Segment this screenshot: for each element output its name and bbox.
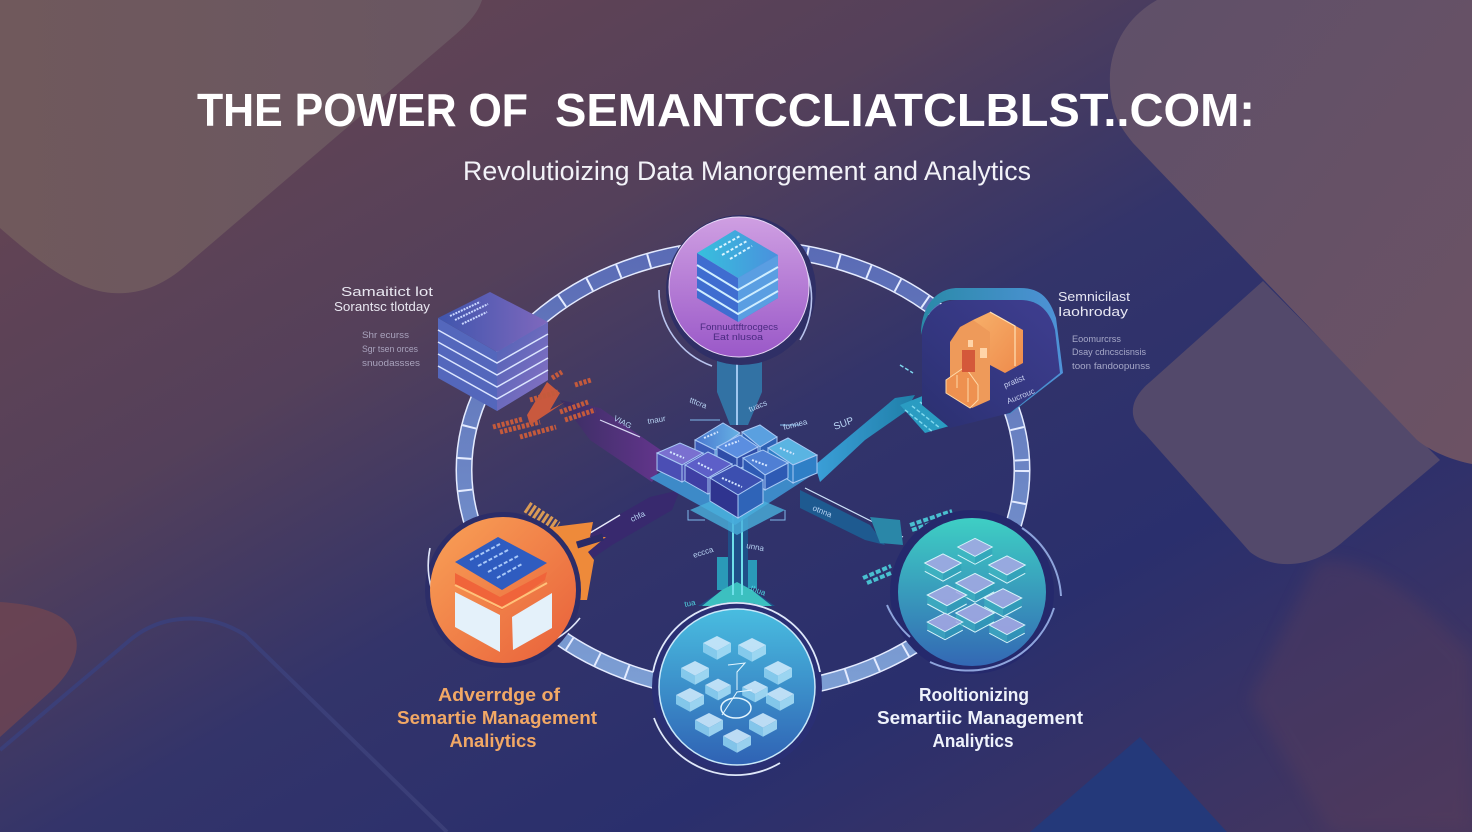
text: bottom-left label: Adverrdge of — [438, 685, 561, 705]
teal circuit right — [863, 365, 953, 583]
text: bottom-left label: Analiytics — [450, 731, 536, 751]
node: left stack — [334, 284, 548, 411]
title — [197, 84, 1255, 136]
text: bottom-right label: Analiytics — [932, 731, 1014, 751]
small connector labels: tttcra — [688, 396, 709, 411]
small connector labels: fonnea — [782, 417, 809, 432]
text: left node label: Shr ecurss — [362, 330, 410, 340]
title: THE POWER OF — [197, 84, 528, 136]
node: right shield — [921, 288, 1151, 428]
small connector labels: otnna — [811, 504, 834, 520]
text: left node label: snuodassses — [362, 358, 421, 368]
subtitle: Revolutioizing Data Manorgement and Analytics — [463, 156, 1031, 186]
small connector labels: chfa — [629, 509, 647, 524]
ring connecting nodes — [464, 248, 1022, 692]
node: top purple circle: Eat nlusoa — [713, 332, 763, 342]
text: left node label: Sorantsc tlotday — [334, 299, 431, 314]
small connector labels — [612, 396, 856, 609]
text: bottom-right label: Rooltionizing — [919, 685, 1029, 705]
node: right shield: Aucrouc — [1005, 387, 1036, 406]
node: top purple circle — [659, 215, 816, 366]
text: right node label: Semnicilast — [1058, 289, 1130, 304]
text: bottom-left label — [397, 685, 597, 751]
central cube cluster — [650, 420, 820, 535]
text: left node label: Samaitict lot — [341, 284, 433, 299]
small connector labels: tua — [684, 598, 697, 609]
text: right node label: Iaohroday — [1058, 304, 1129, 319]
text: right node label: toon fandoopunss — [1072, 361, 1151, 371]
small connector labels: eccca — [692, 545, 715, 560]
node: bottom-left orange circle — [397, 512, 597, 751]
text: right node label: Dsay cdncscisnsis — [1072, 347, 1146, 357]
icon: layered stack — [438, 292, 548, 411]
text: left node label — [334, 284, 433, 368]
icon: network of cubes — [676, 636, 794, 753]
text: left node label: Sgr tsen orces — [362, 344, 418, 354]
node: bottom-right teal circle — [877, 510, 1083, 751]
orange circuit left — [493, 372, 595, 437]
title: SEMANTCCLIATCLBLST..COM: — [555, 84, 1255, 136]
icon: open book — [455, 537, 552, 652]
text: bottom-right label — [877, 685, 1083, 751]
node: right shield: pratist — [1002, 373, 1027, 390]
small connector labels: tuacs — [747, 398, 768, 414]
connector bands — [560, 355, 915, 606]
small connector labels: VIAG — [612, 414, 633, 431]
small connector labels: thua — [749, 584, 768, 598]
text: right node label: Eoomurcrss — [1072, 334, 1122, 344]
icon: orange block — [946, 312, 1023, 408]
small connector labels: tnaur — [647, 414, 667, 426]
text: bottom-left label: Semartie Management — [397, 708, 597, 728]
text: right node label — [1058, 289, 1151, 371]
icon: blue stack — [697, 230, 778, 322]
node: top purple circle: Fonnuuttftrocgecs — [700, 322, 779, 332]
small connector labels: SUP — [832, 415, 856, 433]
orange connector lower left — [527, 507, 606, 600]
node: bottom blue circle — [652, 602, 822, 775]
icon: glass tile cluster — [925, 538, 1025, 643]
text: bottom-right label: Semartiic Management — [877, 708, 1083, 728]
small connector labels: unna — [746, 541, 765, 553]
